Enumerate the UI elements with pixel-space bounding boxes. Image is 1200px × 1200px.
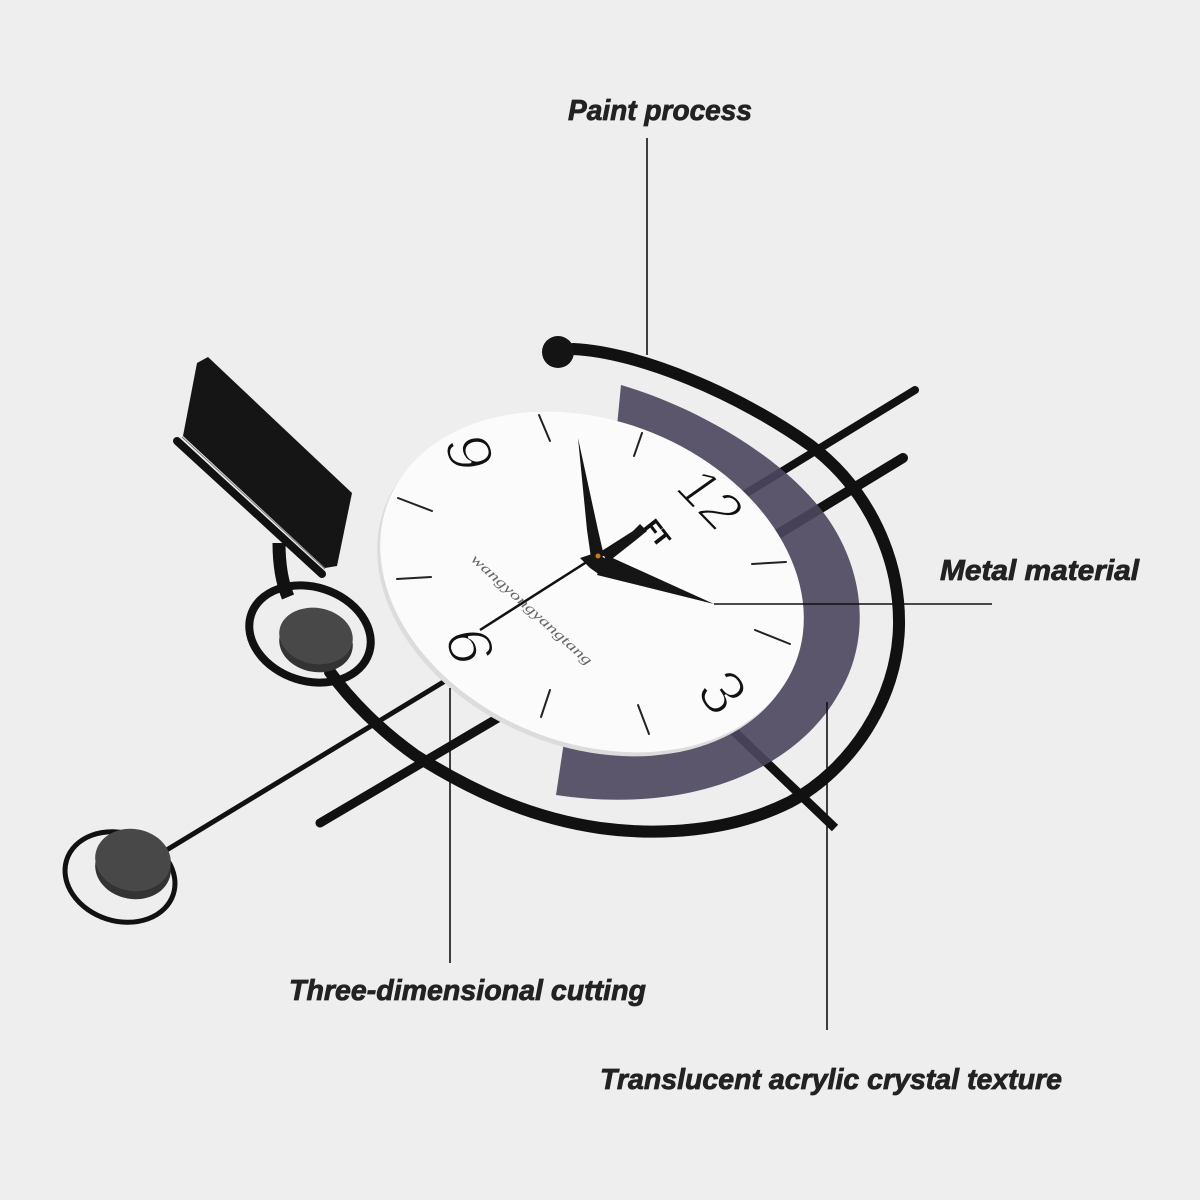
upper ring with grey disc (237, 570, 383, 698)
pendulum rod (165, 678, 450, 851)
leader line: metal material (714, 603, 992, 605)
ring end ball (542, 336, 574, 368)
label: translucent acrylic crystal texture: Translucent acrylic crystal texture (600, 1064, 1062, 1096)
script signature: wangyongyangtang (467, 552, 595, 669)
numeral 9: 9 (430, 430, 509, 476)
clock face (326, 351, 855, 817)
clock hands (480, 438, 714, 630)
numeral 3: 3 (683, 656, 762, 728)
numeral 6: 6 (430, 623, 510, 669)
numeral 12: 12 (663, 459, 758, 540)
metal bars behind the clock (320, 390, 915, 828)
translucent acrylic crescent (556, 385, 860, 800)
hour ticks (397, 415, 790, 734)
label: three-dimensional cutting: Three-dimensional cutting (289, 975, 646, 1007)
brand logo: FT (639, 515, 676, 552)
lower ring with grey disc (53, 818, 187, 936)
black rectangular panel (177, 357, 352, 597)
metal ring arc (330, 349, 899, 832)
label: metal material: Metal material (940, 555, 1140, 587)
leader line: three-dimensional cutting (449, 688, 451, 963)
leader line: paint process (646, 138, 648, 355)
label: paint process: Paint process (568, 95, 752, 127)
leader line: translucent acrylic (826, 702, 828, 1030)
